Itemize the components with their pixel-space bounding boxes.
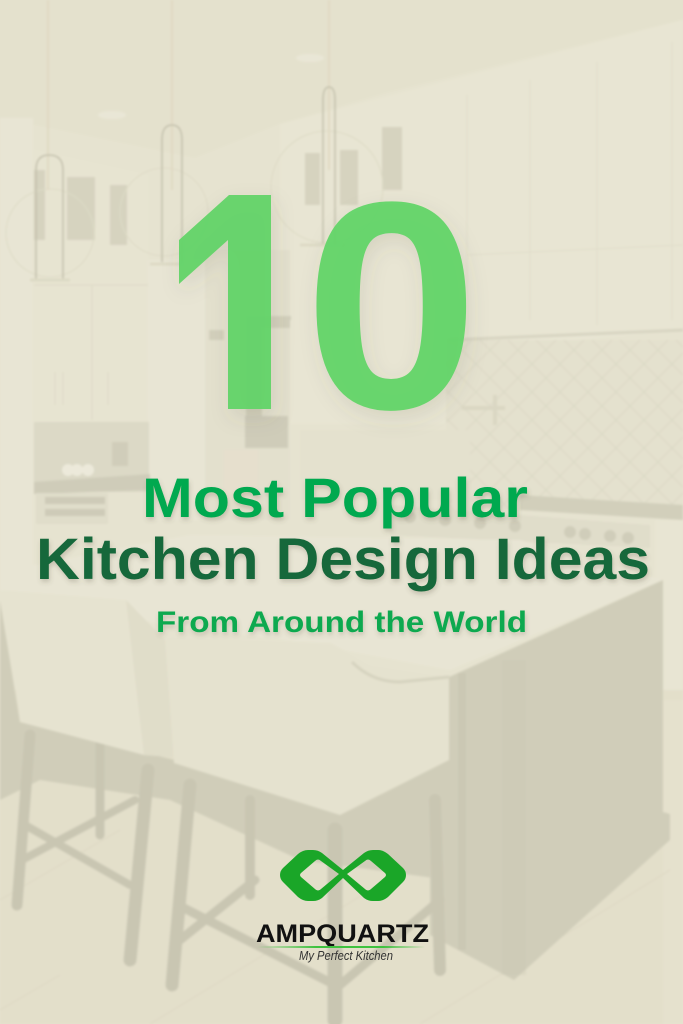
upper cabinets (280, 20, 683, 350)
ceiling (0, 0, 683, 158)
stove (520, 495, 683, 520)
floor (0, 690, 683, 1024)
range hood bar and backsplash (446, 340, 683, 510)
title line: Kitchen Design Ideas: Kitchen Design Ideas (36, 527, 650, 592)
logo: Ampquartz (256, 850, 429, 963)
sink and faucet (245, 416, 288, 448)
title line: Most Popular: Most Popular (142, 466, 528, 529)
numeral one: 1 (152, 153, 309, 469)
subtitle: From Around the World (156, 606, 527, 639)
pendant lights (6, 0, 383, 277)
left cabinets (34, 150, 148, 422)
stool legs (17, 735, 440, 1020)
island side (300, 580, 670, 980)
shadow under seats (0, 600, 449, 880)
tagline: My Perfect Kitchen (299, 949, 393, 963)
glass cabinet panes (34, 127, 402, 245)
island countertop (0, 535, 663, 670)
left backsplash and counter (34, 422, 149, 492)
headline number: 10 (179, 195, 470, 420)
numeral zero: 0 (304, 140, 479, 471)
stools: seat backs (3, 590, 174, 757)
brand name: AMPQUARTZ (256, 920, 429, 948)
icon: infinity mark (280, 850, 406, 901)
